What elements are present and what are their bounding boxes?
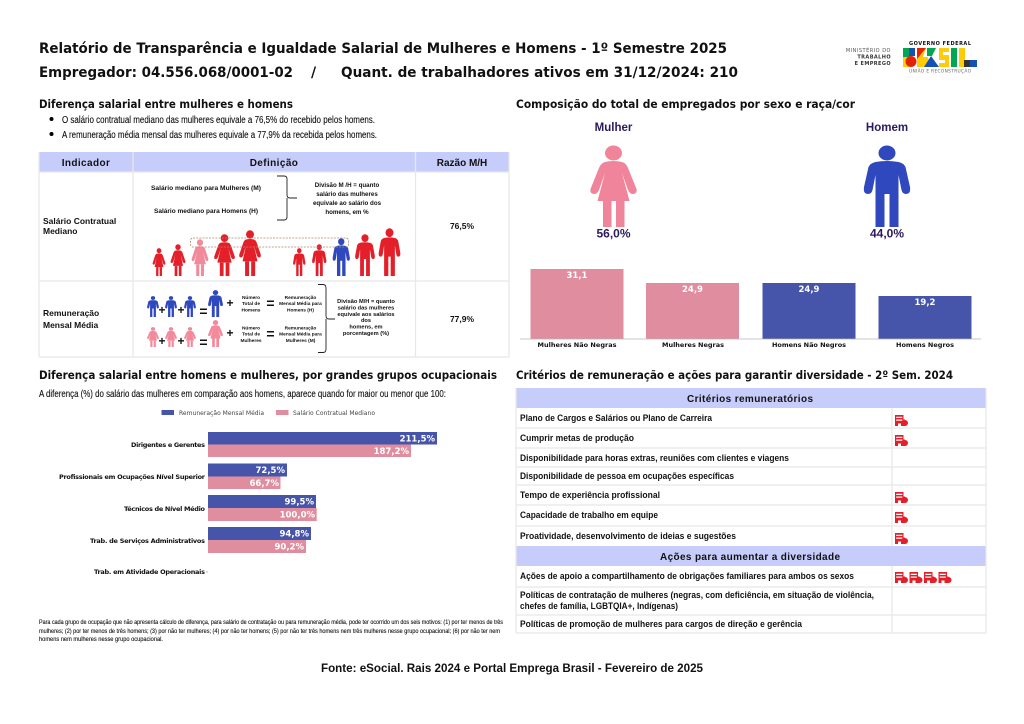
- definition: salário mediano: homens, em %: [325, 209, 369, 216]
- action rows: [520, 571, 874, 629]
- footnote: homens nem mulheres nesse grupo ocupacional.: [39, 636, 163, 643]
- bar chart: composição por sexo e raça: Homens Não Negros: [772, 341, 846, 349]
- logo: ministério: [846, 46, 891, 67]
- bar chart: grupos ocupacionais: 100,0%: [280, 510, 315, 520]
- definition: remuneração média: Remuneração: [285, 326, 316, 332]
- bullet list: [50, 115, 377, 141]
- bar chart: grupos ocupacionais: 99,5%: [284, 498, 314, 508]
- icons: soma mulheres: +: [158, 334, 166, 348]
- icons: ações presentes: [895, 572, 952, 583]
- criteria rows: Disponibilidade de pessoa em ocupações específicas: [520, 471, 734, 481]
- definition: salário mediano: salário das mulheres: [316, 191, 378, 198]
- definition: remuneração média: Mulheres (M): [286, 338, 316, 344]
- definition: remuneração média: Número: [242, 295, 260, 301]
- bar chart: composição por sexo e raça: 24,9: [799, 285, 820, 295]
- icon: homem 44,0%: [864, 122, 910, 240]
- row label: salário contratual mediano: [43, 216, 116, 236]
- bar chart: composição por sexo e raça: 24,9: [682, 285, 703, 295]
- legend: [162, 410, 375, 417]
- row label: remuneração média: Mensal Média: [43, 320, 99, 330]
- icons: soma mulheres: =: [266, 326, 275, 342]
- definition: remuneração média: Homens: [242, 308, 261, 314]
- action rows: Ações de apoio a compartilhamento de obrigações familiares para ambos os sexos: [520, 571, 854, 581]
- definition: remuneração média: Mensal Média para: [279, 332, 322, 338]
- bar chart: grupos ocupacionais: Trab. em Atividade Operacionais: [94, 568, 205, 576]
- bar chart: composição por sexo e raça: 31,1: [567, 271, 588, 281]
- bar chart: grupos ocupacionais: 187,2%: [374, 447, 409, 457]
- icon: mulher 56,0%: 56,0%: [596, 226, 631, 240]
- definition: remuneração média: salário das mulheres: [338, 306, 394, 312]
- heading: diferença salarial: Diferença salarial entre mulheres e homens: [39, 97, 293, 111]
- definition: remuneração média: Número: [242, 326, 260, 332]
- bar chart: grupos ocupacionais: 66,7%: [250, 479, 279, 489]
- definition: remuneração média: [240, 284, 395, 352]
- bar chart: composição por sexo e raça: Mulheres Negras: [662, 341, 724, 349]
- heading: composição: Composição do total de empregados por sexo e raça/cor: [516, 97, 855, 111]
- bar chart: grupos ocupacionais: 90,2%: [274, 542, 304, 552]
- value: razão remuneração: 77,9%: [450, 314, 474, 324]
- icons: soma mulheres: +: [226, 326, 234, 340]
- logo: governo federal brasil: [903, 41, 977, 74]
- footnote: mulheres; (2) por ter menos de três homens; (3) por não ter mulheres; (4) por não ter homens; (5) por não ter três homens nem três mulheres nesse grupo ocupacional; (6) por não ter nem: [39, 628, 500, 635]
- definition: remuneração média: dos: [361, 318, 371, 324]
- icons: soma mulheres: [147, 320, 275, 350]
- definition: remuneração média: Divisão M/H = quanto: [337, 299, 395, 305]
- bar chart: grupos ocupacionais: 72,5%: [256, 466, 285, 476]
- icon: mulher 56,0%: Mulher: [595, 122, 633, 134]
- bar chart: grupos ocupacionais: Trab. de Serviços Administrativos: [90, 537, 205, 545]
- icon: mulher 56,0%: [590, 122, 637, 240]
- table header: [62, 158, 487, 169]
- title: [39, 41, 738, 81]
- table header: Razão M/H: [437, 158, 487, 169]
- definition: salário mediano: Divisão M /H = quanto: [315, 182, 379, 189]
- icons: critérios presentes: [895, 415, 908, 544]
- bar chart: grupos ocupacionais: 94,8%: [280, 530, 309, 540]
- definition: salário mediano: equivale ao salário dos: [313, 200, 382, 207]
- logo: ministério: TRABALHO: [857, 54, 891, 60]
- logo: governo federal brasil: UNIÃO E RECONSTRUÇÃO: [909, 68, 972, 74]
- section header: critérios remuneratórios: Critérios remuneratórios: [687, 394, 813, 405]
- action rows: chefes de família, LGBTQIA+, Indígenas): [520, 601, 678, 611]
- bar chart: grupos ocupacionais: Dirigentes e Gerentes: [131, 441, 205, 449]
- row label: remuneração média: Remuneração: [43, 308, 99, 318]
- criteria rows: Capacidade de trabalho em equipe: [520, 510, 658, 520]
- criteria rows: Plano de Cargos e Salários ou Plano de Carreira: [520, 413, 712, 423]
- definition: salário mediano: Salário mediano para Homens (H): [154, 208, 258, 215]
- definition: salário mediano: [151, 176, 382, 220]
- footnote: Para cada grupo de ocupação que não apresenta cálculo de diferença, para salário de contratação ou para remuneração média, pode ter ocorrido um dos seis motivos: (1) por ter menos de três: [39, 619, 504, 626]
- icons: soma homens: +: [226, 296, 234, 310]
- icon: homem 44,0%: Homem: [866, 122, 908, 134]
- definition: remuneração média: Mulheres: [240, 338, 262, 344]
- action rows: Políticas de promoção de mulheres para cargos de direção e gerência: [520, 619, 802, 629]
- icons: soma homens: =: [266, 295, 275, 311]
- bar chart: composição por sexo e raça: [520, 269, 981, 349]
- icons: soma mulheres: =: [199, 334, 208, 350]
- title: Relatório de Transparência e Igualdade Salarial de Mulheres e Homens - 1º Semestre 2025: [39, 41, 727, 57]
- panel: tabela critérios: [516, 388, 986, 633]
- text: nota da diferença: A diferença (%) do salário das mulheres em comparação aos homens, aparece quando for maior ou menor que 100:: [39, 389, 446, 400]
- legend: Salário Contratual Mediano: [293, 410, 375, 417]
- definition: remuneração média: Mensal Média para: [279, 301, 322, 307]
- criteria rows: Disponibilidade para horas extras, reuniões com clientes e viagens: [520, 453, 789, 463]
- definition: remuneração média: homens, em: [349, 324, 383, 330]
- bar chart: grupos ocupacionais: [59, 432, 437, 576]
- definition: remuneração média: Total de: [242, 332, 260, 338]
- footnote: [39, 619, 504, 643]
- panel: tabela indicadores: [39, 152, 509, 357]
- row label: remuneração média: [43, 308, 99, 330]
- icons: soma homens: =: [199, 303, 208, 319]
- table header: Definição: [250, 158, 298, 169]
- icon: homem 44,0%: 44,0%: [870, 226, 904, 240]
- action rows: Políticas de contratação de mulheres (negras, com deficiência, em situação de violência,: [520, 590, 874, 600]
- icons: mediana de mulheres e homens: [153, 228, 400, 276]
- title: Quant. de trabalhadores ativos em 31/12/2024: 210: [341, 65, 738, 81]
- icons: soma homens: +: [158, 303, 166, 317]
- definition: remuneração média: equivale aos salários: [337, 312, 395, 318]
- heading: critérios: Critérios de remuneração e ações para garantir diversidade - 2º Sem. 2024: [516, 368, 953, 382]
- criteria rows: Tempo de experiência profissional: [520, 490, 660, 500]
- criteria rows: Cumprir metas de produção: [520, 433, 635, 443]
- source: Fonte: eSocial. Rais 2024 e Portal Emprega Brasil - Fevereiro de 2025: [321, 661, 703, 675]
- section header: ações para aumentar a diversidade: Ações para aumentar a diversidade: [660, 552, 840, 563]
- icons: soma homens: +: [177, 303, 185, 317]
- row label: salário contratual mediano: Mediano: [43, 226, 77, 236]
- bar chart: composição por sexo e raça: 19,2: [915, 298, 936, 308]
- definition: remuneração média: porcentagem (%): [343, 331, 389, 337]
- criteria rows: Proatividade, desenvolvimento de ideias e sugestões: [520, 531, 736, 541]
- legend: Remuneração Mensal Média: [179, 410, 264, 417]
- bar chart: grupos ocupacionais: 211,5%: [400, 434, 435, 444]
- value: razão salário contratual: 76,5%: [450, 221, 474, 231]
- criteria rows: [520, 413, 789, 541]
- table header: Indicador: [62, 158, 110, 169]
- icons: soma homens: [147, 290, 275, 319]
- title: /: [311, 65, 317, 81]
- bar chart: composição por sexo e raça: Homens Negros: [896, 341, 954, 349]
- logo: ministério: E EMPREGO: [855, 61, 891, 67]
- bar chart: grupos ocupacionais: Técnicos de Nível Médio: [124, 505, 206, 513]
- logo: ministério: MINISTÉRIO DO: [846, 46, 891, 54]
- bar chart: grupos ocupacionais: Profissionais em Ocupações Nível Superior: [59, 473, 206, 481]
- bullet list: A remuneração média mensal das mulheres equivale a 77,9% da recebida pelos homens.: [62, 130, 377, 141]
- bullet list: O salário contratual mediano das mulheres equivale a 76,5% do recebido pelos homens.: [62, 115, 375, 126]
- icons: soma mulheres: +: [177, 334, 185, 348]
- row label: salário contratual mediano: Salário Contratual: [43, 216, 116, 226]
- title: Empregador: 04.556.068/0001-02: [39, 65, 293, 81]
- bar chart: composição por sexo e raça: Mulheres Não Negras: [538, 341, 617, 349]
- definition: salário mediano: Salário mediano para Mulheres (M): [151, 185, 261, 192]
- logo: governo federal brasil: GOVERNO FEDERAL: [909, 41, 972, 47]
- heading: grupos ocupacionais: Diferença salarial entre homens e mulheres, por grandes grupos ocupacionais: [39, 368, 497, 382]
- definition: remuneração média: Remuneração: [285, 295, 316, 301]
- definition: remuneração média: Total de: [242, 301, 260, 307]
- definition: remuneração média: Homens (H): [287, 308, 314, 314]
